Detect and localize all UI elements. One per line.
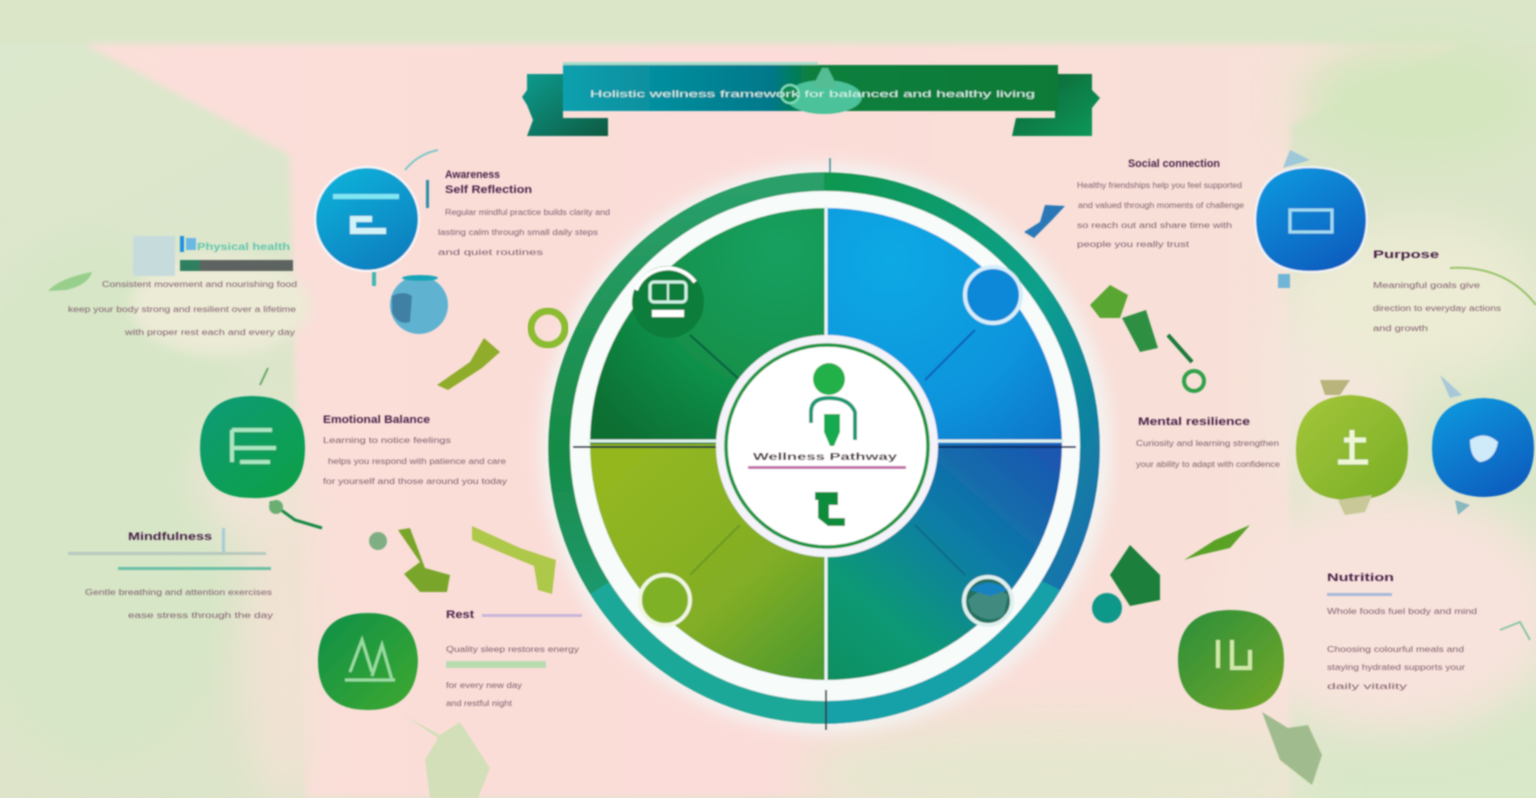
icon: globe [390, 275, 448, 334]
text block [438, 208, 610, 257]
text block: ease stress through the day [128, 611, 273, 620]
text block [323, 436, 507, 486]
text block: so reach out and share time with [1077, 221, 1232, 230]
center hub [716, 335, 938, 557]
text block: and quiet routines [438, 248, 543, 257]
icon: ring lime [531, 311, 565, 345]
text block: daily vitality [1327, 682, 1407, 691]
text block: Choosing colourful meals and [1327, 645, 1464, 654]
text block: Consistent movement and nourishing food [102, 280, 297, 289]
panel: middle left callout [200, 368, 507, 528]
wheel node: bottom left [640, 575, 690, 625]
title text: Holistic wellness framework for balanced and healthy living [590, 89, 1035, 99]
heading: Rest [446, 609, 474, 621]
text block [68, 280, 297, 337]
text block: keep your body strong and resilient over a lifetime [68, 305, 297, 314]
text block: direction to everyday actions [1373, 304, 1501, 313]
icon: sage leaf [1262, 712, 1322, 785]
panel: middle right callout [1136, 416, 1281, 469]
panel: far left callout [48, 236, 297, 337]
heading: Social connection [1128, 158, 1220, 170]
quadrant: top right [826, 208, 1062, 444]
text block: Meaningful goals give [1373, 281, 1481, 290]
heading: Physical health [197, 242, 290, 253]
text block: and growth [1373, 324, 1428, 333]
icon: small key left [437, 338, 500, 390]
heading: Mindfulness [128, 531, 212, 543]
icon: blue circle far right [1432, 375, 1534, 515]
icon: sprout [815, 492, 845, 526]
outer ring [548, 172, 1100, 724]
icon: person [811, 363, 855, 446]
text block [1136, 439, 1281, 469]
text block [446, 645, 579, 708]
text block [1077, 181, 1245, 249]
heading: Self Reflection [445, 184, 532, 196]
icons: lower left leaves [369, 526, 556, 594]
icon: blue circle [315, 150, 438, 286]
icon: green circle [318, 613, 418, 710]
icon: blue circle [1255, 150, 1367, 288]
text block: Whole foods fuel body and mind [1327, 607, 1477, 616]
text block [85, 588, 273, 620]
wheel node: top right [965, 267, 1021, 323]
wheel chart [540, 158, 1112, 734]
hub label [748, 452, 906, 469]
icon: key blue [1024, 205, 1065, 238]
text block: Healthy friendships help you feel supported [1077, 181, 1242, 190]
icons: right leaves [1090, 285, 1250, 623]
heading [426, 169, 532, 208]
text block: Curiosity and learning strengthen [1136, 439, 1279, 448]
text block: people you really trust [1077, 240, 1190, 249]
text block: lasting calm through small daily steps [438, 228, 598, 237]
panel: lower left callout [68, 528, 273, 620]
text block [1327, 607, 1477, 691]
icon: leaf [48, 272, 92, 291]
wheel node: top left [632, 266, 704, 338]
panel: bottom right callout [1178, 572, 1530, 785]
icon: pale leaf [405, 716, 490, 798]
text block: helps you respond with patience and care [328, 457, 507, 466]
heading: Emotional Balance [323, 414, 430, 426]
text block: and valued through moments of challenge [1078, 201, 1245, 210]
panel: far right callout [1373, 249, 1536, 333]
icon: lime circle [1296, 380, 1408, 515]
text block: and restful night [446, 699, 513, 708]
text block: with proper rest each and every day [124, 328, 295, 337]
panel: bottom left callout [318, 609, 582, 798]
text block: Quality sleep restores energy [446, 645, 579, 654]
heading: Mental resilience [1138, 416, 1250, 428]
icon: green circle [200, 368, 322, 528]
text block: Learning to notice feelings [323, 436, 451, 445]
text block: Regular mindful practice builds clarity and [445, 208, 610, 217]
wheel node: bottom right [964, 577, 1012, 625]
icon: olive circle [1178, 610, 1284, 710]
text block: Gentle breathing and attention exercises [85, 588, 272, 597]
heading: Nutrition [1327, 572, 1394, 584]
quadrant: bottom left [590, 444, 826, 680]
text block: staying hydrated supports your [1327, 663, 1465, 672]
heading: Awareness [445, 169, 500, 181]
heading [446, 609, 582, 621]
text block: for every new day [446, 681, 522, 690]
heading: Purpose [1373, 249, 1439, 261]
text block: your ability to adapt with confidence [1136, 460, 1281, 469]
text block: for yourself and those around you today [323, 477, 507, 486]
quadrant: bottom right [826, 444, 1062, 680]
hub label: Wellness Pathway [753, 452, 898, 463]
title banner [522, 62, 1100, 136]
quadrant: top left [590, 208, 826, 444]
panel: top left callout [315, 150, 610, 334]
panel: top right callout [1024, 150, 1367, 288]
text block [1373, 281, 1501, 333]
